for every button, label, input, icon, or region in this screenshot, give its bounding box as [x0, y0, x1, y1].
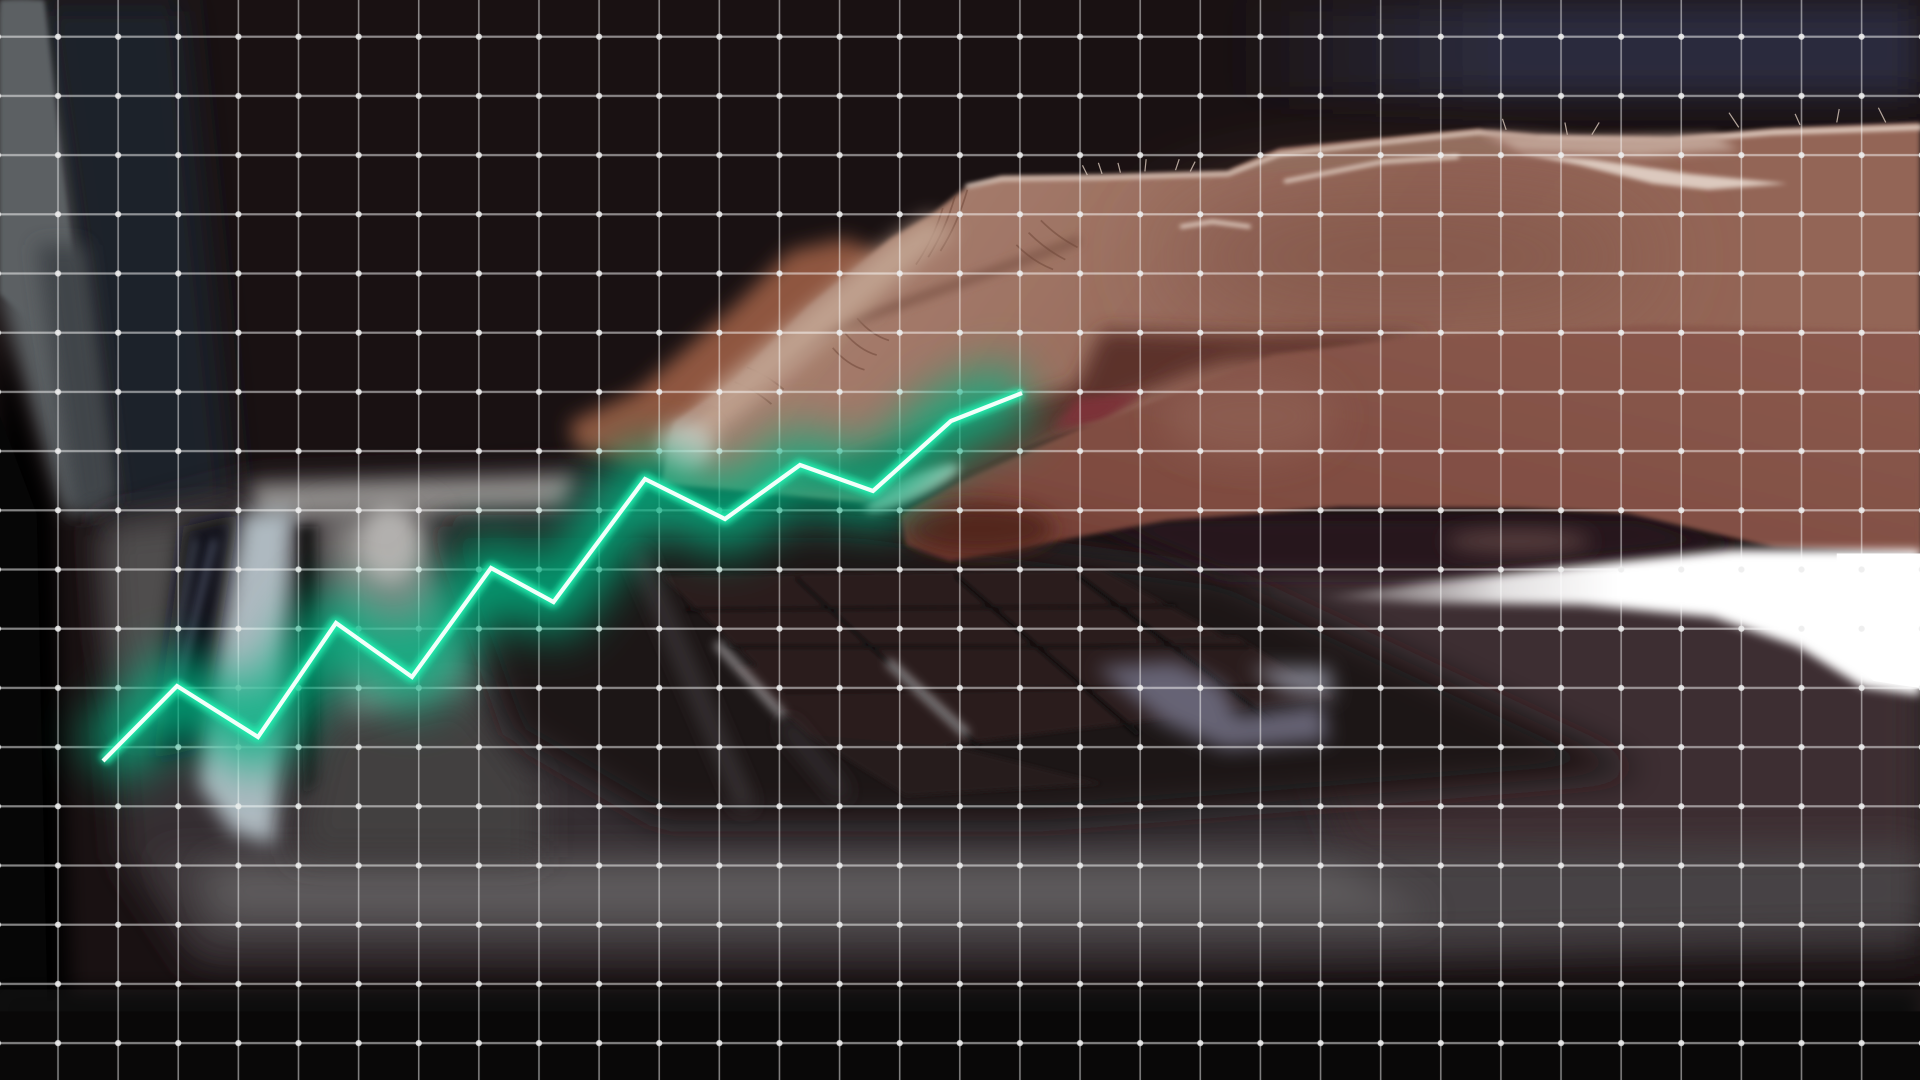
white overexposed sheet — [1322, 550, 1920, 696]
back finger — [569, 239, 918, 471]
blurred pale finger tips — [659, 422, 713, 471]
back of hand shading — [1163, 202, 1653, 312]
main hand — [661, 122, 1920, 553]
hand — [569, 122, 1920, 561]
light finger edge — [671, 216, 955, 478]
laptop screen edge — [0, 0, 235, 1080]
shadow between fingers — [784, 331, 1433, 484]
gap between index and middle finger — [681, 240, 1080, 433]
finger tip shadow — [906, 504, 1053, 553]
bottom shadow — [0, 989, 1920, 1080]
front finger — [900, 324, 1920, 561]
hair on the hand — [1082, 108, 1886, 175]
keyboard — [441, 514, 1739, 820]
laptop body — [98, 471, 1920, 967]
neon rising line chart — [103, 393, 1022, 761]
wrinkles — [735, 190, 1078, 404]
light ridges and hair on the knuckles — [967, 127, 1920, 227]
